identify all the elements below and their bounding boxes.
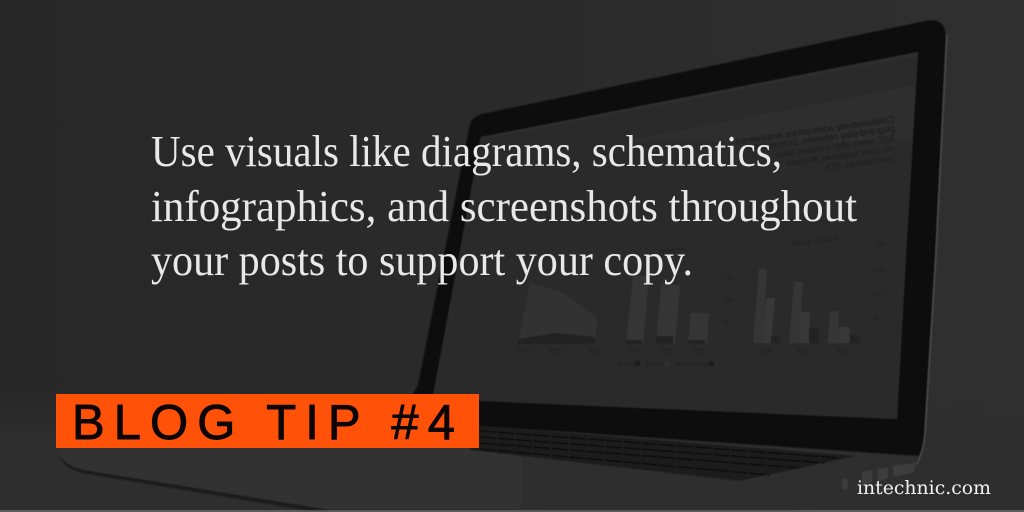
chart year labels: 2013 (660, 349, 674, 355)
bar chart: middle (625, 276, 709, 344)
main tip text (151, 127, 857, 285)
chart axis labels: 300 (876, 243, 887, 249)
chart year labels: 2013 (796, 349, 810, 355)
main tip text: Use visuals like diagrams, schematics, (151, 127, 782, 176)
chart axis labels: 225 (723, 277, 734, 283)
side ports (842, 463, 916, 490)
mirrored chart titles (658, 236, 838, 256)
lid edge highlight (917, 34, 947, 464)
chart legend (617, 361, 714, 368)
chart axis labels: 0 (720, 342, 724, 348)
mirrored document text: B2C users after installed base (775, 133, 895, 160)
mirrored document text: plug-and-play networks. Dynamically (748, 123, 895, 153)
mirrored document text: visualize customer directed (786, 143, 895, 168)
chart year labels: 2014 (758, 349, 772, 355)
chart year labels: 2012 (588, 349, 602, 355)
main tip text: infographics, and screenshots throughout (151, 182, 857, 231)
mirrored document text: revolutionary ROI. (822, 153, 895, 173)
chart year labels: 2014 (516, 349, 530, 355)
chart legend: Mutual funds (677, 362, 711, 368)
chart axis labels: 75 (722, 321, 729, 327)
mirrored document text (735, 114, 895, 173)
chart year labels: 2014 (628, 349, 642, 355)
mirrored document text: Collaboratively administrate empowered (735, 114, 895, 146)
mirrored chart titles: Product growth (791, 236, 838, 248)
chart axis labels: 225 (875, 268, 886, 274)
chart year labels: 2013 (548, 349, 562, 355)
badge: blog tip: BLOG TIP #4 (72, 396, 455, 450)
area chart (518, 283, 597, 344)
screen title bar (474, 56, 917, 170)
keyboard (470, 425, 856, 481)
main tip text: your posts to support your copy. (151, 236, 693, 285)
chart year labels: 2012 (836, 349, 850, 355)
site url: intechnic.com (857, 477, 991, 499)
chart axis labels: 150 (873, 293, 884, 299)
laptop lid (395, 20, 946, 456)
chart legend: Stocks (645, 362, 663, 368)
laptop screen (433, 52, 918, 419)
chart axis labels: 0 (872, 342, 876, 348)
chart legend: Bonds (617, 362, 634, 368)
mirrored chart titles: Unit sales (658, 246, 690, 256)
bar chart: right (753, 269, 860, 343)
base front edge shadow (60, 456, 330, 510)
chart axis labels: 75 (872, 317, 879, 323)
chart year labels: 2012 (692, 349, 706, 355)
chart axis labels (720, 243, 887, 348)
chart year labels (516, 349, 850, 355)
laptop base (58, 426, 918, 510)
chart axis labels: 150 (723, 299, 734, 305)
